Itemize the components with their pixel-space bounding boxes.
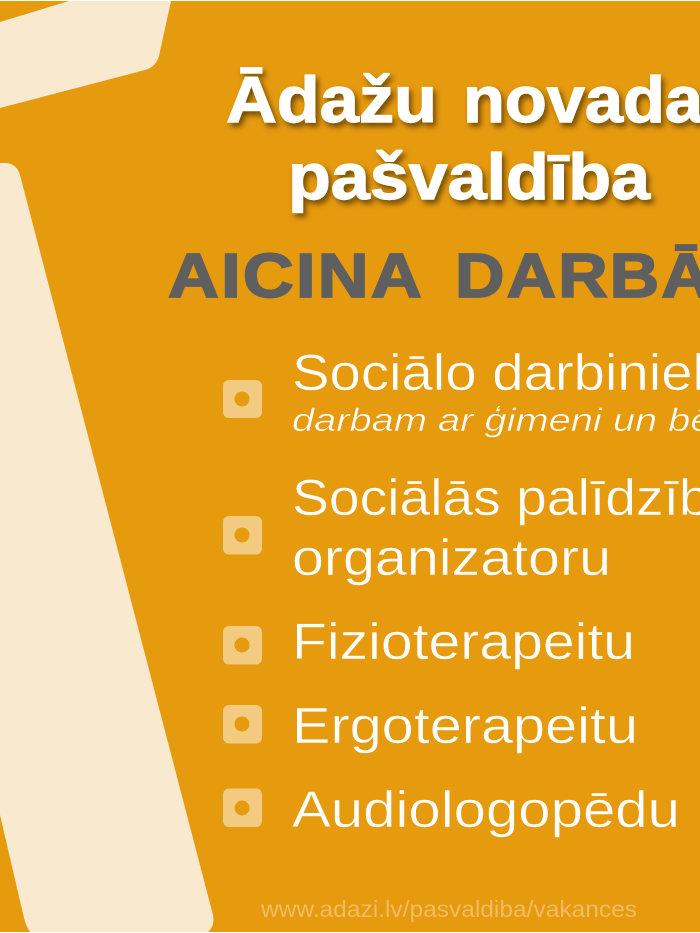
job: social worker xyxy=(292,344,700,438)
title: pašvaldība xyxy=(288,140,651,213)
icon: bullet 4 xyxy=(223,705,262,744)
job: occupational therapist: Ergoterapeitu xyxy=(292,697,638,754)
title: Ādažu xyxy=(226,63,437,136)
title xyxy=(226,63,700,213)
job: speech therapist: Audiologopēdu xyxy=(292,781,680,838)
icon: bullet 5 xyxy=(223,788,262,827)
subtitle: DARBĀ xyxy=(455,242,700,311)
title: novada xyxy=(463,63,700,136)
job: physiotherapist: Fizioterapeitu xyxy=(292,613,635,670)
website link: www.adazi.lv/pasvaldiba/vakances xyxy=(260,896,637,922)
subtitle xyxy=(168,242,700,311)
subtitle: AICINA xyxy=(168,242,424,311)
icon: bullet 3 xyxy=(223,626,262,664)
icon: bullet 2 xyxy=(223,516,262,554)
job: social worker: Sociālo darbinieku xyxy=(292,344,700,401)
job: social assistance organiser: organizatoru xyxy=(292,529,611,586)
icon: bullet 1 xyxy=(223,380,262,418)
job: social assistance organiser xyxy=(292,469,700,586)
decorative shape: upper cream bar xyxy=(0,1,171,108)
job: social worker: darbam ar ģimeni un bērniem xyxy=(292,402,700,438)
decorative shape: lower cream bar xyxy=(0,163,213,932)
